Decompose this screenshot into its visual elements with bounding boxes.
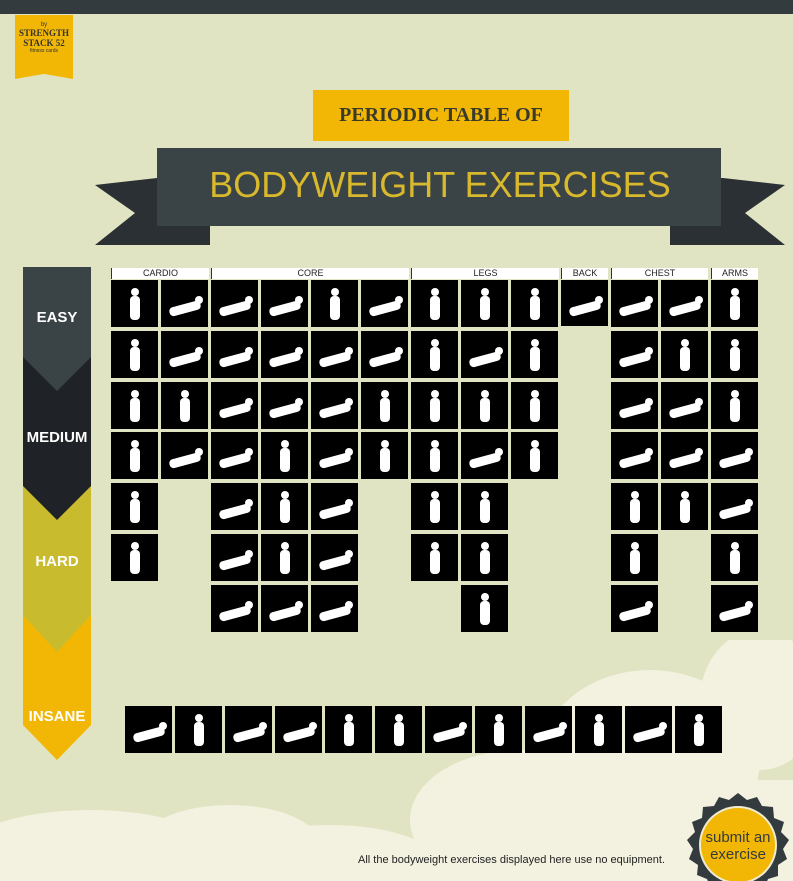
insane row bbox=[125, 706, 722, 753]
text: ARMS bbox=[722, 268, 748, 278]
category headers bbox=[111, 268, 758, 279]
logo: fitness cards bbox=[30, 48, 58, 54]
badge: submit an exercise bbox=[687, 793, 789, 881]
difficulty arrow bbox=[23, 267, 91, 760]
footnote: All the bodyweight exercises displayed here use no equipment. bbox=[358, 854, 665, 866]
logo bbox=[15, 15, 73, 79]
logo: STACK 52 bbox=[23, 38, 65, 48]
text: BACK bbox=[573, 268, 597, 278]
text: CARDIO bbox=[143, 268, 178, 278]
text: CHEST bbox=[645, 268, 675, 278]
text: EASY bbox=[37, 309, 77, 326]
text: HARD bbox=[35, 553, 79, 570]
title: periodic table of: PERIODIC TABLE OF bbox=[339, 104, 543, 126]
logo: by bbox=[41, 22, 47, 28]
text: MEDIUM bbox=[27, 429, 87, 446]
banner: BODYWEIGHT EXERCISES bbox=[209, 164, 671, 205]
banner bbox=[95, 148, 785, 245]
text: LEGS bbox=[473, 268, 498, 278]
badge: submit an exercise: submit an bbox=[705, 829, 771, 846]
clouds bbox=[0, 640, 793, 881]
text: INSANE bbox=[29, 708, 85, 725]
title: periodic table of bbox=[313, 90, 569, 141]
text: CORE bbox=[297, 268, 324, 278]
badge: submit an exercise: exercise bbox=[710, 846, 766, 863]
exercise grid bbox=[111, 280, 758, 632]
logo: STRENGTH bbox=[19, 28, 69, 38]
top bar bbox=[0, 0, 793, 14]
